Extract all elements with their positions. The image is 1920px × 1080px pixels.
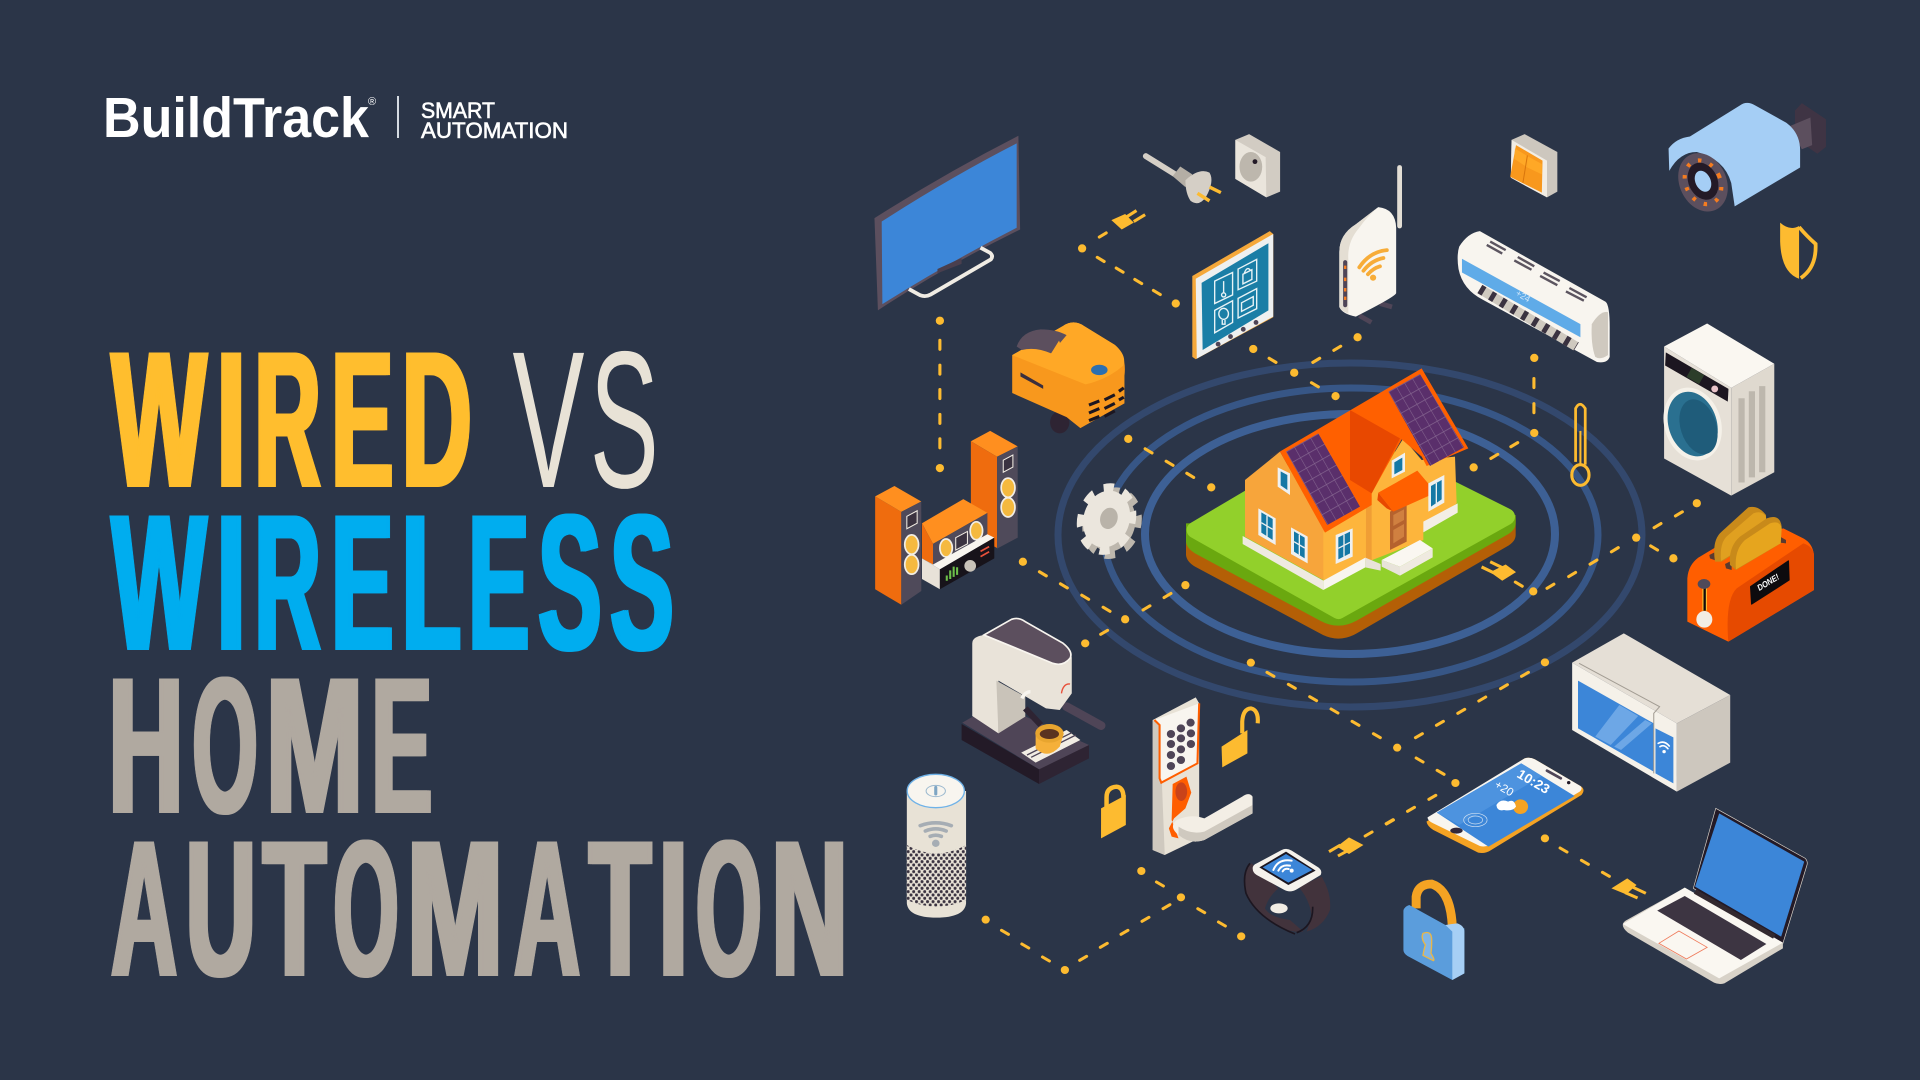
icon: curved tv bbox=[874, 136, 1020, 310]
icon: yellow plug near laptop bbox=[1611, 878, 1646, 898]
house on green platform bbox=[1186, 368, 1516, 639]
dashed connectors upper right bbox=[1470, 354, 1701, 596]
icon: toaster bbox=[1687, 507, 1814, 642]
icon: robot vacuum bbox=[1012, 322, 1125, 433]
logo: BuildTrack Smart Automation: BuildTrack bbox=[103, 86, 369, 150]
dashed connectors upper left bbox=[936, 233, 1362, 623]
title: O bbox=[696, 800, 762, 1018]
title: D bbox=[402, 312, 472, 528]
house walls bbox=[1245, 438, 1457, 581]
icon: smartphone: +20 bbox=[1492, 779, 1515, 799]
title: U bbox=[186, 800, 256, 1018]
title: R bbox=[254, 312, 321, 528]
icon: air conditioner bbox=[1458, 231, 1610, 362]
logo: BuildTrack Smart Automation: AUTOMATION bbox=[421, 118, 568, 143]
title: A bbox=[111, 800, 177, 1018]
title: I bbox=[217, 474, 246, 692]
logo: BuildTrack Smart Automation: SMART bbox=[421, 98, 495, 123]
title: E bbox=[371, 638, 432, 854]
icon: yellow plug near watch bbox=[1329, 837, 1363, 856]
icon: security camera bbox=[1669, 103, 1826, 220]
icon: coffee machine bbox=[962, 618, 1101, 784]
platform bbox=[1186, 438, 1516, 639]
dashed connectors lower right bbox=[1387, 658, 1609, 876]
icon: smartphone: 10:23 bbox=[1514, 767, 1553, 797]
windows bbox=[1258, 453, 1444, 564]
title: E bbox=[331, 474, 393, 692]
icon: smartphone bbox=[1426, 758, 1584, 853]
icon: wall socket bbox=[1235, 134, 1280, 197]
icon: air conditioner: +24 bbox=[1514, 288, 1532, 304]
icon: shield bbox=[1780, 223, 1816, 279]
dashed connectors lower left bbox=[982, 630, 1401, 974]
title: W bbox=[112, 474, 206, 692]
icon: microwave bbox=[1572, 633, 1730, 792]
roof with solar panels bbox=[1233, 368, 1468, 533]
title: H bbox=[108, 638, 184, 854]
porch and door bbox=[1377, 471, 1436, 550]
title: T bbox=[263, 800, 326, 1018]
title: E bbox=[468, 474, 529, 692]
title: T bbox=[589, 800, 651, 1018]
icon: washing machine bbox=[1654, 323, 1774, 496]
title: O bbox=[192, 638, 258, 854]
icon: laptop bbox=[1623, 808, 1807, 984]
icon: wifi router bbox=[1339, 167, 1400, 322]
title: S bbox=[538, 474, 602, 692]
title: R bbox=[254, 474, 321, 692]
icon: closed padlock small bbox=[1101, 787, 1126, 838]
title: M bbox=[266, 638, 363, 854]
icon: power plug bbox=[1146, 156, 1221, 203]
icon: wall tablet bbox=[1192, 231, 1273, 359]
title: V bbox=[512, 311, 584, 529]
icon: light switch bbox=[1510, 134, 1557, 197]
title: S bbox=[610, 474, 674, 692]
title: W bbox=[112, 312, 206, 528]
icon: open padlock small bbox=[1222, 708, 1258, 767]
base trim and steps bbox=[1243, 503, 1458, 590]
title: S bbox=[590, 311, 659, 529]
title: I bbox=[217, 312, 246, 528]
title: N bbox=[771, 800, 848, 1018]
icon: smart speaker bbox=[907, 774, 966, 918]
icon: smart watch bbox=[1245, 849, 1330, 934]
logo: BuildTrack Smart Automation bbox=[103, 86, 568, 150]
icon: yellow plug near house bbox=[1482, 562, 1516, 581]
icon: large blue padlock bbox=[1403, 884, 1464, 980]
title bbox=[108, 311, 848, 1018]
icon: gear bbox=[1078, 481, 1141, 561]
title: I bbox=[659, 800, 688, 1018]
icon: smart door lock bbox=[1153, 697, 1253, 855]
title: E bbox=[331, 312, 393, 528]
title: L bbox=[402, 474, 461, 692]
icon: sound system bbox=[875, 431, 1018, 605]
logo: BuildTrack Smart Automation: ® bbox=[368, 96, 376, 108]
title: A bbox=[514, 800, 580, 1018]
title: O bbox=[333, 800, 399, 1018]
icon: toaster: DONE! bbox=[1755, 572, 1781, 593]
title: M bbox=[407, 800, 503, 1018]
icon: small yellow plug top bbox=[1111, 211, 1145, 229]
wireless signal rings bbox=[1058, 363, 1642, 707]
icon: thermometer bbox=[1572, 404, 1589, 485]
